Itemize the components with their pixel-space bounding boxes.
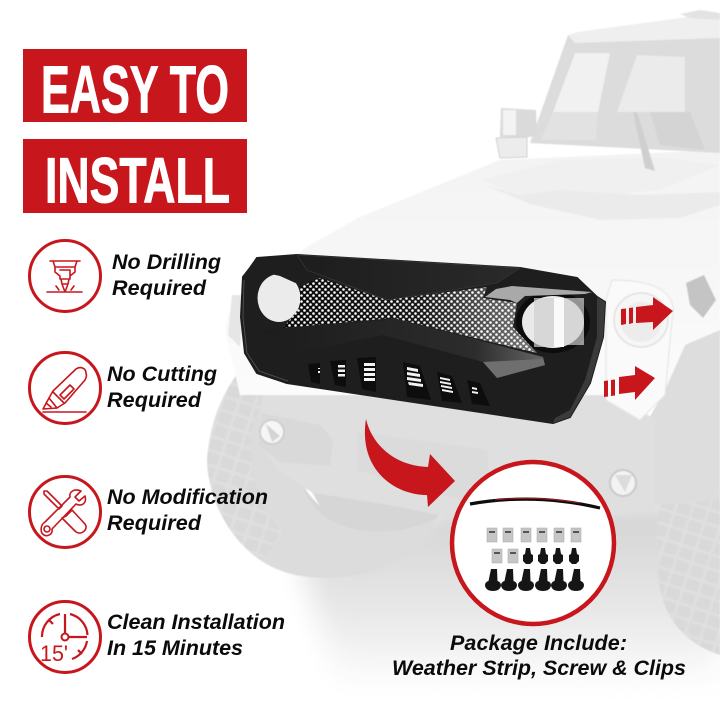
top brow plate bbox=[297, 255, 520, 300]
side mirror bbox=[500, 108, 537, 137]
label: no cutting required: No Cutting bbox=[107, 362, 217, 386]
right fog lamp bbox=[610, 470, 636, 496]
feature: no drilling bbox=[30, 240, 221, 312]
hood latch bbox=[686, 275, 716, 318]
package caption: Package Include: bbox=[450, 631, 627, 655]
left eye opening bbox=[258, 274, 300, 322]
label: clean installation in 15 minutes: Clean Installation bbox=[107, 610, 285, 634]
left tire tread bbox=[207, 363, 285, 560]
label: no modification required: No Modification bbox=[107, 485, 268, 509]
right fender and body bbox=[648, 325, 720, 505]
right eye opening bbox=[516, 291, 590, 353]
grille bbox=[241, 255, 605, 423]
package caption: Weather Strip, Screw & Clips bbox=[392, 656, 686, 680]
icon: drill bbox=[30, 240, 100, 312]
mouth facet bbox=[263, 318, 545, 378]
large screws bbox=[485, 569, 584, 591]
ground shadow bbox=[300, 500, 720, 690]
weather strip bbox=[470, 499, 600, 508]
mesh panel bbox=[283, 278, 537, 353]
roof bbox=[568, 13, 720, 43]
label: no drilling required: No Drilling bbox=[112, 250, 221, 274]
feature: no modification: Required bbox=[107, 511, 202, 535]
title banner: easy to: EASY TO bbox=[41, 52, 229, 128]
left fog lamp bbox=[258, 413, 333, 466]
clips bbox=[487, 528, 581, 563]
package contents circle bbox=[452, 462, 614, 624]
feature: no cutting bbox=[30, 352, 217, 424]
left tire bbox=[207, 363, 437, 578]
feature: clean installation: In 15 Minutes bbox=[107, 636, 243, 660]
feature: no modification bbox=[30, 476, 268, 548]
wheel hub shadow bbox=[300, 478, 445, 532]
title banner: easy to bbox=[23, 49, 247, 128]
left grille surround bbox=[228, 295, 244, 347]
icon: wrench and screwdriver bbox=[30, 476, 100, 548]
windshield panes bbox=[553, 53, 610, 112]
small screws bbox=[523, 548, 579, 564]
arrow: curved arrow to package bbox=[365, 419, 455, 507]
title banner: install bbox=[23, 139, 247, 216]
faded jeep photo bbox=[207, 10, 720, 690]
feature: no drilling: Required bbox=[112, 276, 207, 300]
right brow highlight bbox=[485, 286, 592, 303]
package caption bbox=[392, 631, 686, 680]
icon: clock 15 minutes: 15' bbox=[40, 641, 68, 666]
windshield frame bbox=[530, 24, 720, 153]
headlight bbox=[614, 293, 668, 347]
icon: clock 15 minutes bbox=[30, 602, 100, 672]
headlight housing bbox=[606, 280, 673, 420]
hood vent shapes bbox=[480, 158, 720, 197]
grille outer frame bbox=[241, 255, 605, 423]
feature: no cutting: Required bbox=[107, 388, 202, 412]
arrow: lower right pointing arrow bbox=[604, 366, 655, 400]
lower bumper bbox=[258, 395, 655, 522]
title banner: install: INSTALL bbox=[45, 144, 230, 216]
right tire bbox=[657, 420, 720, 655]
vents bbox=[308, 357, 490, 406]
feature: clean installation bbox=[30, 602, 285, 672]
arrow: upper right pointing arrow bbox=[621, 297, 673, 330]
hood bbox=[225, 150, 720, 395]
icon: utility knife bbox=[30, 352, 100, 424]
